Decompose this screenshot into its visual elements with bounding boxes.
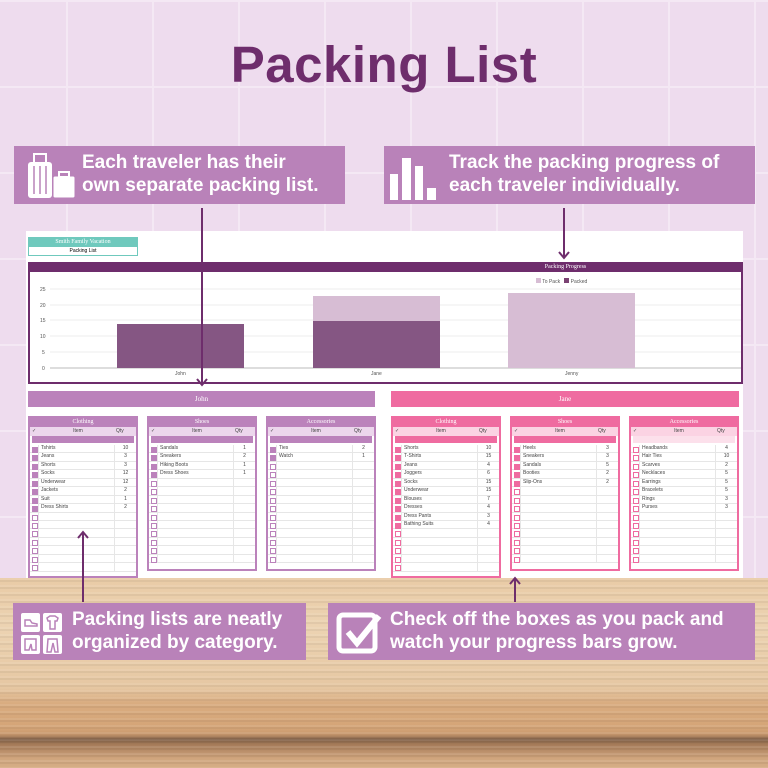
table: Jane clothing: 7 [487, 496, 490, 502]
callout: separate lists: own separate packing list. [82, 175, 319, 196]
table: Jane clothing: Dress Pants [404, 512, 431, 518]
table: Jane clothing [391, 416, 501, 578]
callout: progress: Track the packing progress of [449, 152, 719, 173]
icon: checkbox [336, 612, 382, 654]
arrow: up to categories [77, 530, 89, 602]
header: Jane: Jane [559, 395, 571, 403]
table: John accessories [266, 416, 376, 571]
arrow: up to checkboxes [509, 576, 521, 602]
table: Jane shoes: Qty [598, 428, 606, 434]
callout: categories: Packing lists are neatly [72, 609, 282, 630]
table: Jane accessories: Headbands [642, 445, 668, 451]
callout: progress [384, 146, 755, 204]
bar chart [28, 262, 743, 384]
table: John accessories: 2 [362, 445, 365, 451]
table: Jane clothing: 15 [486, 453, 491, 459]
table: John shoes: Qty [235, 428, 243, 434]
bar chart: 0 [42, 366, 45, 372]
arrow: to John list [196, 208, 208, 386]
table: Jane shoes: Shoes [558, 419, 572, 425]
callout: separate lists [14, 146, 345, 204]
table: Jane accessories: Rings [642, 496, 655, 502]
table: Jane clothing: Shorts [404, 445, 418, 451]
table: John clothing: Shorts [41, 462, 55, 468]
bar chart: Jane [371, 371, 382, 377]
table: Jane clothing: Blouses [404, 496, 422, 502]
table: Jane accessories: Bracelets [642, 487, 663, 493]
table: Jane accessories: 3 [725, 504, 728, 510]
table: John shoes: Shoes [195, 419, 209, 425]
table: Jane shoes [510, 416, 620, 571]
table: Jane accessories: 3 [725, 496, 728, 502]
table: John accessories: Item [311, 428, 321, 434]
table: John clothing: 2 [124, 487, 127, 493]
icon: luggage [28, 153, 74, 198]
table: Jane accessories: 2 [725, 462, 728, 468]
table: Jane clothing: 4 [487, 521, 490, 527]
bar chart: John [175, 371, 186, 377]
table: Jane shoes: 3 [606, 453, 609, 459]
table: John clothing: Dress Shirts [41, 504, 68, 510]
table: John shoes: ✓ [151, 428, 155, 434]
table: Jane clothing: 10 [486, 445, 491, 451]
table: John clothing: Underwear [41, 479, 65, 485]
table: John clothing: Qty [116, 428, 124, 434]
callout: categories: organized by category. [72, 632, 278, 653]
table: Jane clothing: Qty [479, 428, 487, 434]
table: John clothing: 10 [123, 445, 128, 451]
table: John accessories: ✓ [270, 428, 274, 434]
table: John shoes: 1 [243, 462, 246, 468]
table: John accessories: Accessories [307, 419, 335, 425]
icon: category icons [21, 613, 62, 654]
table: John clothing: Jeans [41, 453, 54, 459]
bar chart: To Pack Packed [542, 279, 587, 285]
table: John clothing: 2 [124, 504, 127, 510]
table: Jane clothing: Socks [404, 479, 418, 485]
table: Jane clothing: Item [436, 428, 446, 434]
table: John clothing: Socks [41, 470, 55, 476]
table: John clothing: Tshirts [41, 445, 55, 451]
table: John clothing: ✓ [32, 428, 36, 434]
table: Jane clothing: Underwear [404, 487, 428, 493]
table: Jane shoes: Booties [523, 470, 540, 476]
bar chart: 15 [40, 318, 46, 324]
table: John clothing: 12 [123, 479, 128, 485]
table: Jane accessories: Earrings [642, 479, 661, 485]
table: Jane accessories: Scarves [642, 462, 660, 468]
table: Jane accessories: 5 [725, 479, 728, 485]
arrow: to chart [558, 208, 570, 260]
table: Jane shoes: 5 [606, 462, 609, 468]
icon: bar chart [390, 158, 436, 200]
table: John clothing: Clothing [72, 419, 94, 425]
table: Jane shoes: Heels [523, 445, 536, 451]
header: John: John [195, 395, 208, 403]
table: Jane shoes: Item [555, 428, 565, 434]
table: Jane shoes: Slip-Ons [523, 479, 542, 485]
table: Jane clothing: Bathing Suits [404, 521, 433, 527]
table: John shoes: Hiking Boots [160, 462, 188, 468]
sheet label: Packing List [70, 248, 96, 254]
table: John accessories: Watch [279, 453, 293, 459]
callout: progress: each traveler individually. [449, 175, 680, 196]
table: John shoes: 2 [243, 453, 246, 459]
table: Jane clothing: 6 [487, 470, 490, 476]
table: Jane accessories: Hair Ties [642, 453, 662, 459]
callout: check off: Check off the boxes as you pack and [390, 609, 724, 630]
table: John clothing: 1 [124, 496, 127, 502]
bar chart: Packing Progress [545, 264, 586, 270]
table: Jane clothing: Jeans [404, 462, 417, 468]
table: John shoes: Item [192, 428, 202, 434]
table: Jane clothing: 3 [487, 512, 490, 518]
table: John accessories: Qty [354, 428, 362, 434]
table: Jane clothing: 15 [486, 487, 491, 493]
callout: separate lists: Each traveler has their [82, 152, 286, 173]
table: John clothing [28, 416, 138, 578]
header: John [28, 391, 375, 407]
callout: check off: watch your progress bars grow. [390, 632, 678, 653]
table: Jane accessories: Purses [642, 504, 658, 510]
callout: check off [328, 603, 755, 660]
bar chart: 10 [40, 334, 46, 340]
table: John accessories: Ties [279, 445, 288, 451]
table: John clothing: 3 [124, 462, 127, 468]
table: Jane accessories: 10 [724, 453, 729, 459]
bar chart: 25 [40, 287, 46, 293]
table: John shoes: Dress Shoes [160, 470, 189, 476]
table: Jane accessories: 5 [725, 487, 728, 493]
table: Jane shoes: 2 [606, 479, 609, 485]
table: Jane shoes: 3 [606, 445, 609, 451]
table: Jane clothing: 4 [487, 504, 490, 510]
table: Jane accessories: Necklaces [642, 470, 665, 476]
table: John shoes [147, 416, 257, 571]
table: Jane shoes: ✓ [514, 428, 518, 434]
table: Jane clothing: Dresses [404, 504, 422, 510]
table: Jane clothing: ✓ [395, 428, 399, 434]
sheet label [28, 237, 138, 256]
table: John accessories: 1 [362, 453, 365, 459]
table: Jane clothing: Joggers [404, 470, 422, 476]
callout: categories [13, 603, 306, 660]
table: Jane shoes: Sandals [523, 462, 541, 468]
table: Jane clothing: Clothing [435, 419, 456, 425]
table: John clothing: 12 [123, 470, 128, 476]
table: Jane shoes: 2 [606, 470, 609, 476]
bar chart: Jenny [565, 371, 579, 377]
table: John clothing: Jackets [41, 487, 58, 493]
table: Jane clothing: 4 [487, 462, 490, 468]
table: Jane accessories: 4 [725, 445, 728, 451]
title: Packing List [231, 36, 537, 93]
table: Jane shoes: Sneakers [523, 453, 544, 459]
table: John shoes: 1 [243, 470, 246, 476]
table: Jane accessories: 5 [725, 470, 728, 476]
table: John clothing: Item [73, 428, 83, 434]
table: John clothing: 3 [124, 453, 127, 459]
table: Jane accessories: Item [674, 428, 684, 434]
table: Jane clothing: 15 [486, 479, 491, 485]
table: Jane accessories: Accessories [670, 419, 698, 425]
sheet label: Smith Family Vacation [55, 239, 111, 245]
spreadsheet panel [26, 231, 743, 578]
table: Jane clothing: T-Shirts [404, 453, 421, 459]
bar chart: 5 [42, 350, 45, 356]
table: Jane accessories: ✓ [633, 428, 637, 434]
table: Jane accessories: Qty [717, 428, 725, 434]
table: John clothing: Suit [41, 496, 50, 502]
table: John shoes: Sandals [160, 445, 178, 451]
table: John shoes: Sneakers [160, 453, 181, 459]
table: Jane accessories [629, 416, 739, 571]
header: Jane [391, 391, 739, 407]
bar chart: 20 [40, 303, 46, 309]
table: John shoes: 1 [243, 445, 246, 451]
